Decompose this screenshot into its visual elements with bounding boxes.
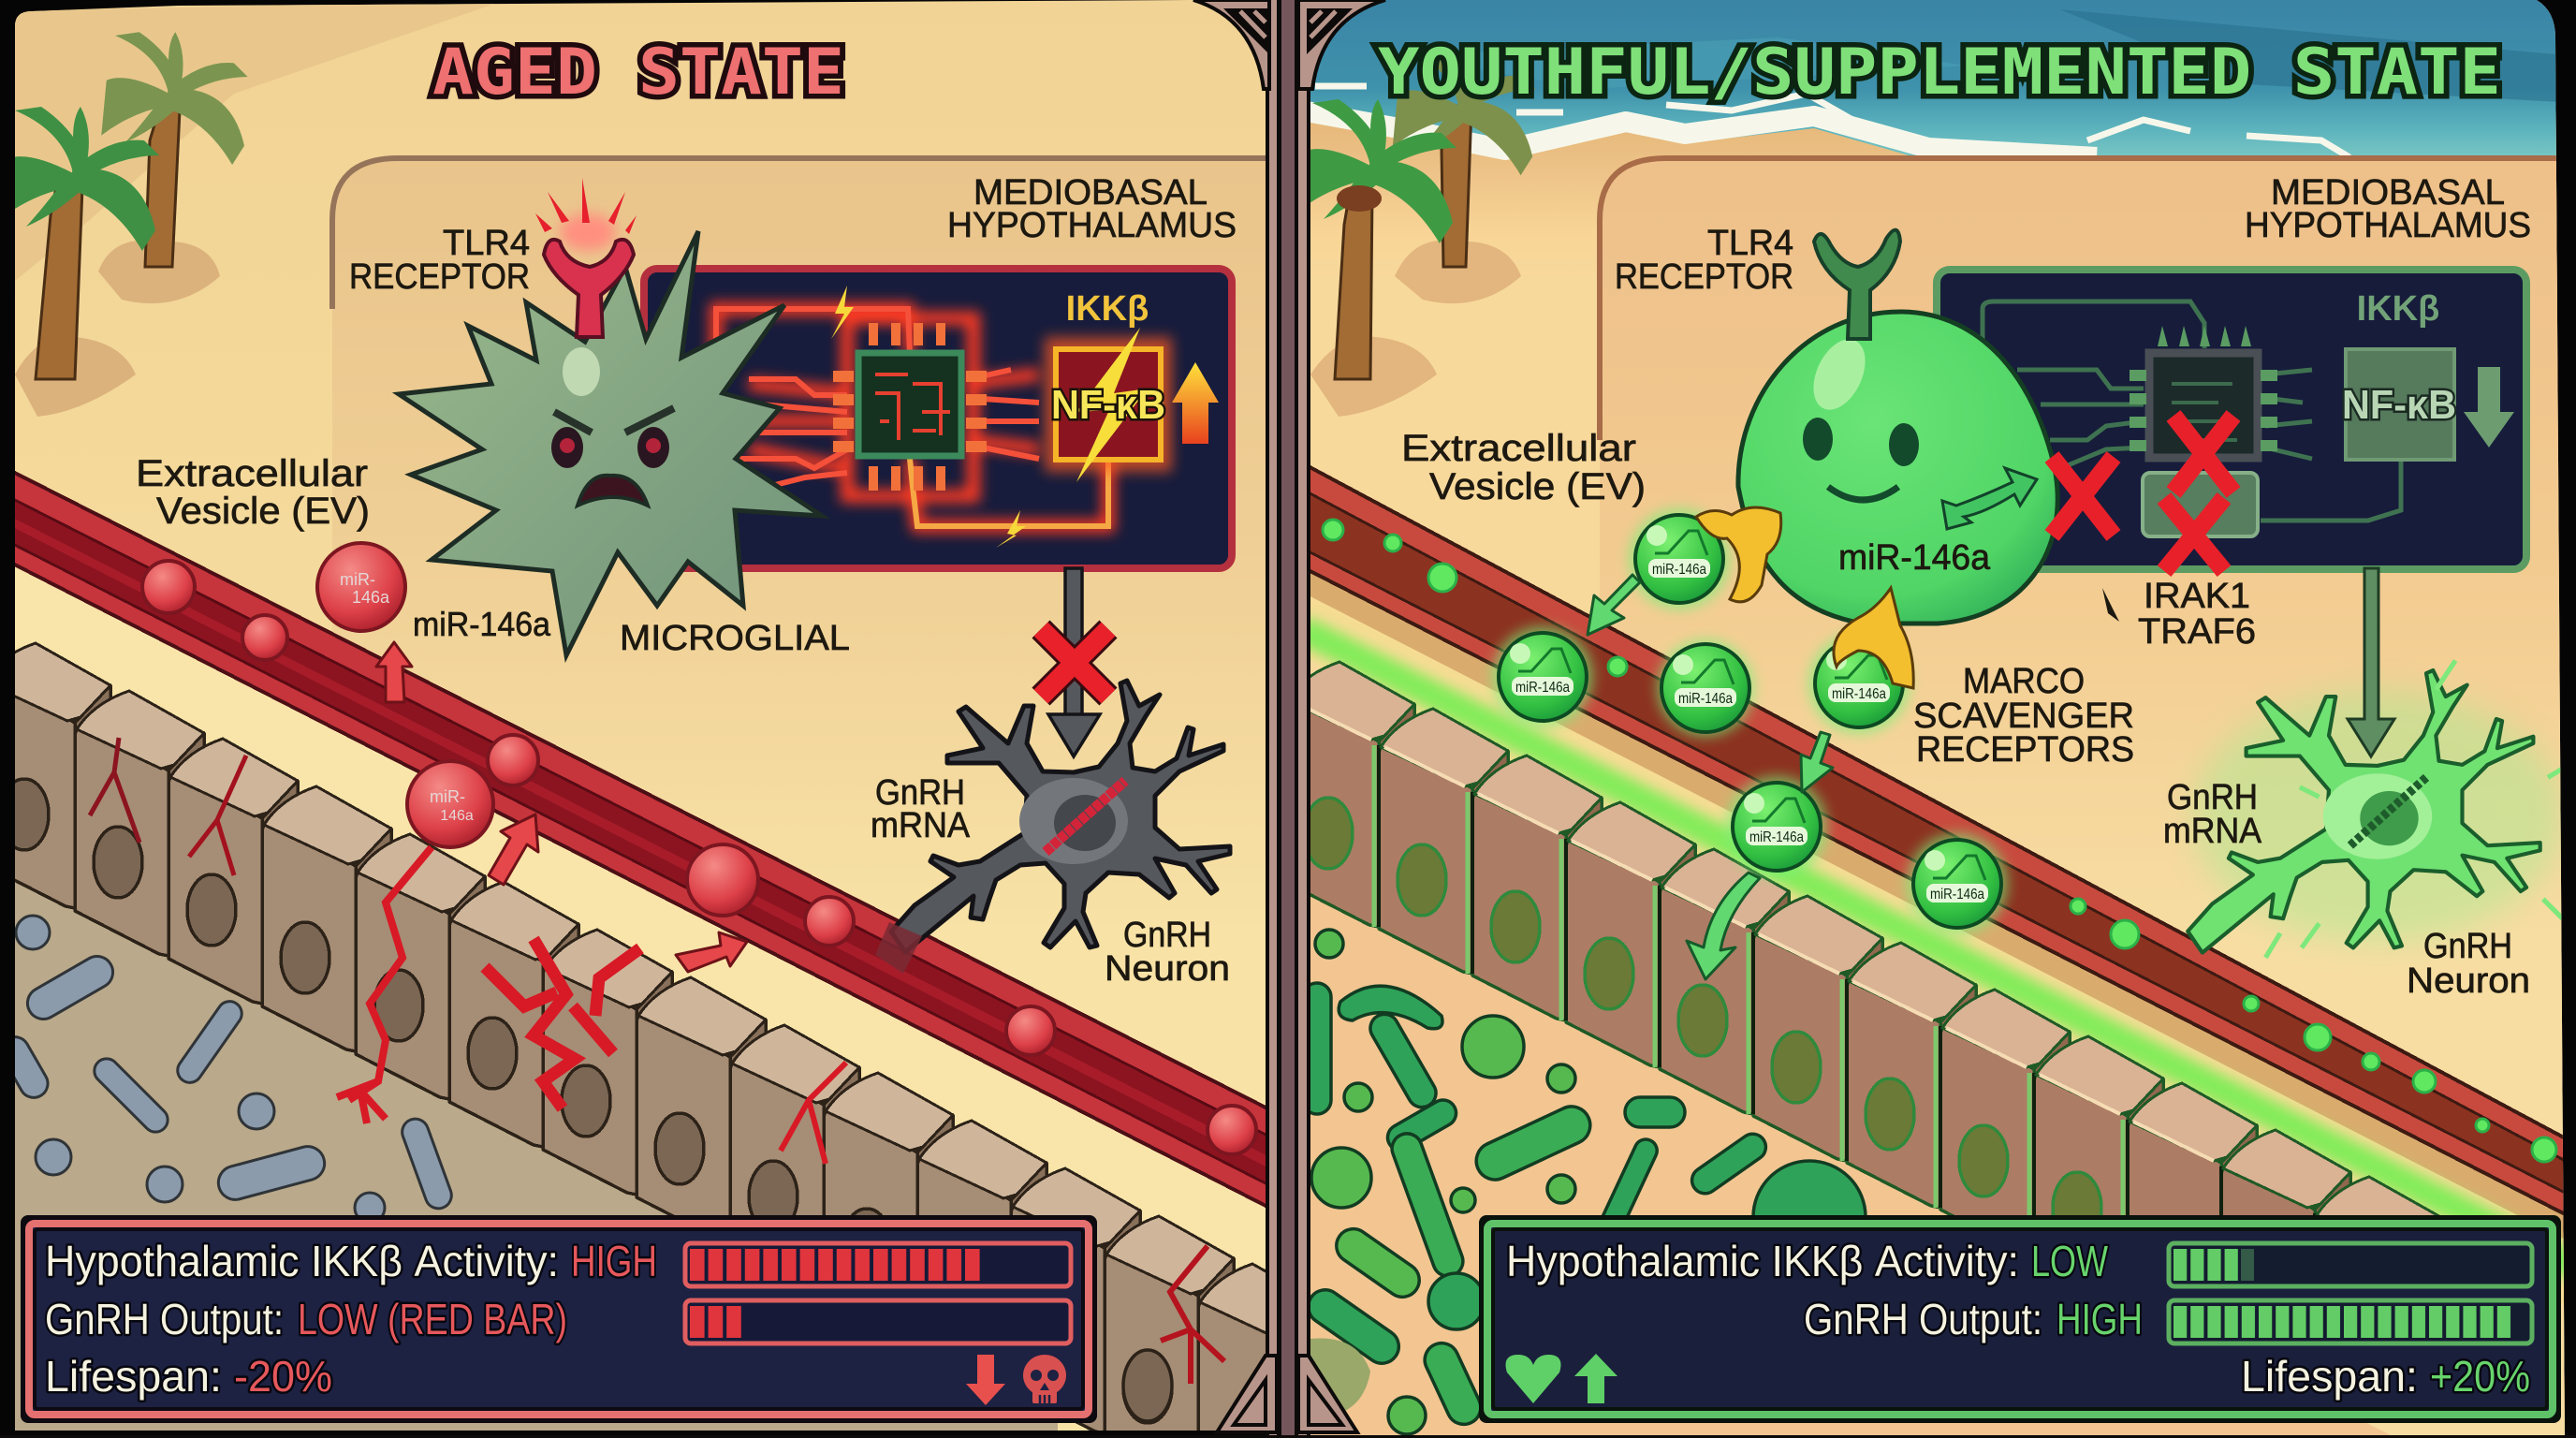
red X [1041, 629, 1108, 697]
eyes [1803, 418, 1833, 461]
ground [1301, 885, 2396, 1438]
labels youthful: GnRH [2167, 778, 2258, 817]
palm trees [0, 32, 248, 417]
chip [833, 323, 987, 491]
row GnRH: LOW (RED BAR) [298, 1295, 567, 1343]
status panel: youthful [1479, 1215, 2561, 1423]
smile [1828, 487, 1898, 500]
vesicle crossing wall: miR- [430, 787, 465, 806]
green particles in vessel [1323, 520, 2556, 1162]
hypothalamus region [1600, 158, 2576, 1438]
title aged: AGED STATE [432, 36, 844, 110]
chip [2130, 326, 2277, 458]
vesicle 6: miR-146a [1930, 887, 1984, 902]
blood vessel [1301, 462, 2576, 1220]
row GnRH: HIGH [2056, 1295, 2143, 1343]
labels aged: TLR4 [443, 224, 530, 263]
axon root in vessel [875, 922, 922, 974]
vesicle crossing wall [407, 761, 493, 847]
dark signalling box [1937, 270, 2526, 569]
row lifespan: Lifespan: [2241, 1352, 2418, 1401]
labels aged: RECEPTOR [349, 257, 530, 297]
labels youthful: SCAVENGER [1913, 697, 2134, 736]
green vesicles [1492, 508, 2008, 934]
labels aged: Vesicle (EV) [156, 491, 370, 532]
labels youthful: Extracellular [1401, 428, 1636, 469]
vesicle 5 [1733, 783, 1821, 871]
panel: aged state [0, 0, 1327, 1438]
vesicle 1 [1635, 515, 1723, 603]
row IKK: Hypothalamic IKKβ Activity: [45, 1237, 559, 1285]
strip between vessel and wall [15, 567, 554, 844]
neuron youthful [2188, 661, 2576, 958]
row lifespan [2241, 1352, 2530, 1401]
hypothalamus outline [332, 158, 1273, 309]
olive shade [1310, 1338, 1370, 1414]
title youthful: YOUTHFUL/SUPPLEMENTED STATE [1378, 36, 2501, 110]
vesicle crossing wall: 146a [440, 808, 474, 824]
row GnRH: GnRH Output: [1804, 1295, 2042, 1343]
darker dune [15, 0, 505, 281]
row IKK: HIGH [571, 1237, 657, 1285]
green microglia blob [1738, 312, 2057, 624]
highlight [1803, 331, 1876, 418]
labels youthful: Vesicle (EV) [1429, 466, 1646, 507]
background sand [1301, 0, 2576, 1438]
ground [0, 866, 1058, 1438]
labels aged: MEDIOBASAL [973, 173, 1208, 213]
row GnRH [45, 1295, 567, 1343]
TLR4 receptor red [535, 178, 637, 337]
status panel: aged [21, 1215, 1097, 1423]
row IKK: LOW [2031, 1237, 2108, 1285]
vesicle 4: miR-146a [1832, 686, 1886, 702]
neuron aged [891, 681, 1230, 952]
epithelial wall [1281, 662, 2538, 1395]
labels aged: Extracellular [136, 453, 368, 494]
labels youthful: TRAF6 [2138, 612, 2256, 652]
labels youthful: Neuron [2407, 961, 2530, 1001]
labels youthful: RECEPTOR [1615, 257, 1793, 297]
labels aged: GnRH [1123, 916, 1211, 955]
labels aged: HYPOTHALAMUS [947, 206, 1237, 245]
sparks [831, 286, 1026, 548]
arrow to neuron [2348, 568, 2394, 756]
MARCO receptor lower [1834, 588, 1913, 688]
labels youthful: TLR4 [1707, 224, 1793, 263]
TLR4 receptor green [1814, 230, 1900, 339]
vesicle 3 [1661, 644, 1749, 732]
labels youthful: RECEPTORS [1916, 730, 2134, 770]
palm trees [1297, 46, 1536, 417]
circuit glow [716, 309, 1108, 526]
IRAK1 TRAF6 complex box [2143, 473, 2258, 536]
wall cracks [90, 738, 1224, 1384]
hypothalamus region [332, 161, 1266, 625]
double arrow [1942, 468, 2037, 529]
green glow [1492, 508, 2008, 934]
labels aged: MICROGLIAL [620, 619, 850, 658]
green arrows [1588, 575, 1833, 979]
top corner ornaments [1193, 0, 1385, 89]
hypothalamus outline [1600, 158, 2576, 440]
NF-kB box: NF-κB [2342, 382, 2456, 428]
arrow down [2464, 367, 2514, 448]
labels youthful [1401, 173, 2531, 1001]
labels youthful: HYPOTHALAMUS [2245, 206, 2531, 245]
small pointer [2102, 588, 2119, 622]
labels aged: GnRH [875, 773, 965, 813]
vesicle EV aged: miR- [340, 570, 375, 589]
circuit lines [1983, 301, 2401, 521]
labels youthful: MEDIOBASAL [2271, 173, 2505, 213]
NF-kB box: NF-κB [1051, 382, 1165, 428]
row lifespan: Lifespan: [45, 1352, 222, 1401]
label IKKβ: IKKβ [2357, 289, 2439, 329]
sea [1301, 0, 2576, 161]
labels aged: Neuron [1105, 949, 1230, 989]
foam [1301, 86, 2349, 157]
highlight [563, 347, 600, 396]
label IKKβ: IKKβ [1066, 289, 1149, 329]
arrow up [1172, 362, 1219, 444]
mouth [578, 476, 648, 506]
brows [554, 408, 674, 433]
MARCO receptor upper [1696, 507, 1781, 602]
arrow up [1574, 1354, 1617, 1403]
vesicle EV aged: 146a [352, 588, 390, 607]
skull [1023, 1355, 1066, 1403]
labels youthful: MARCO [1963, 662, 2085, 701]
bacteria green [1302, 930, 1866, 1434]
vesicle 5: miR-146a [1749, 829, 1804, 845]
epithelial wall [0, 643, 1327, 1435]
bottom corner ornaments [1217, 1356, 1357, 1432]
escape arrows [376, 642, 747, 972]
dark signalling box [644, 269, 1232, 568]
bar IKK low [2169, 1243, 2532, 1286]
vesicle 4 [1815, 639, 1903, 727]
row lifespan [45, 1352, 332, 1401]
inhibited arrow [1048, 568, 1100, 756]
NF-kB box [2342, 349, 2456, 460]
row lifespan: +20% [2430, 1352, 2530, 1401]
strip between vessel and wall [1301, 562, 2576, 1311]
vesicle 1: miR-146a [1652, 562, 1706, 578]
circuit lines [716, 309, 1108, 526]
row GnRH: GnRH Output: [45, 1295, 284, 1343]
background sand [15, 0, 1266, 631]
labels youthful: mRNA [2163, 812, 2262, 851]
panel: youthful state [1281, 0, 2576, 1438]
red vesicles in vessel [142, 561, 1256, 1154]
labels aged: miR-146a [413, 605, 551, 643]
bar IKK high [685, 1243, 1071, 1286]
nucleus far right [1123, 1350, 1172, 1421]
eyes [551, 427, 583, 468]
sand band under vessel [1301, 566, 2576, 1245]
blood vessel [0, 465, 1273, 1210]
label miR-146a: miR-146a [1838, 538, 1991, 578]
labels aged [136, 173, 1237, 989]
labels aged: mRNA [871, 806, 971, 845]
vesicle 6 [1913, 840, 2001, 928]
glow line [1301, 629, 2576, 1268]
vesicle 3: miR-146a [1678, 691, 1733, 707]
vesicle 2 [1499, 633, 1587, 721]
labels youthful: IRAK1 [2144, 577, 2250, 616]
vesicle 2: miR-146a [1515, 680, 1570, 696]
heart [1505, 1355, 1561, 1403]
red X marks [2052, 416, 2233, 571]
bar GnRH low [685, 1300, 1071, 1343]
vesicle EV aged [317, 543, 405, 631]
row IKK: Hypothalamic IKKβ Activity: [1506, 1237, 2019, 1285]
microglial cell [399, 231, 822, 655]
row lifespan: -20% [234, 1352, 332, 1401]
bar GnRH high [2169, 1300, 2532, 1343]
labels youthful: GnRH [2423, 927, 2512, 966]
arrow down [966, 1355, 1005, 1405]
NF-kB box [1045, 328, 1172, 482]
bacteria grey [0, 916, 455, 1223]
